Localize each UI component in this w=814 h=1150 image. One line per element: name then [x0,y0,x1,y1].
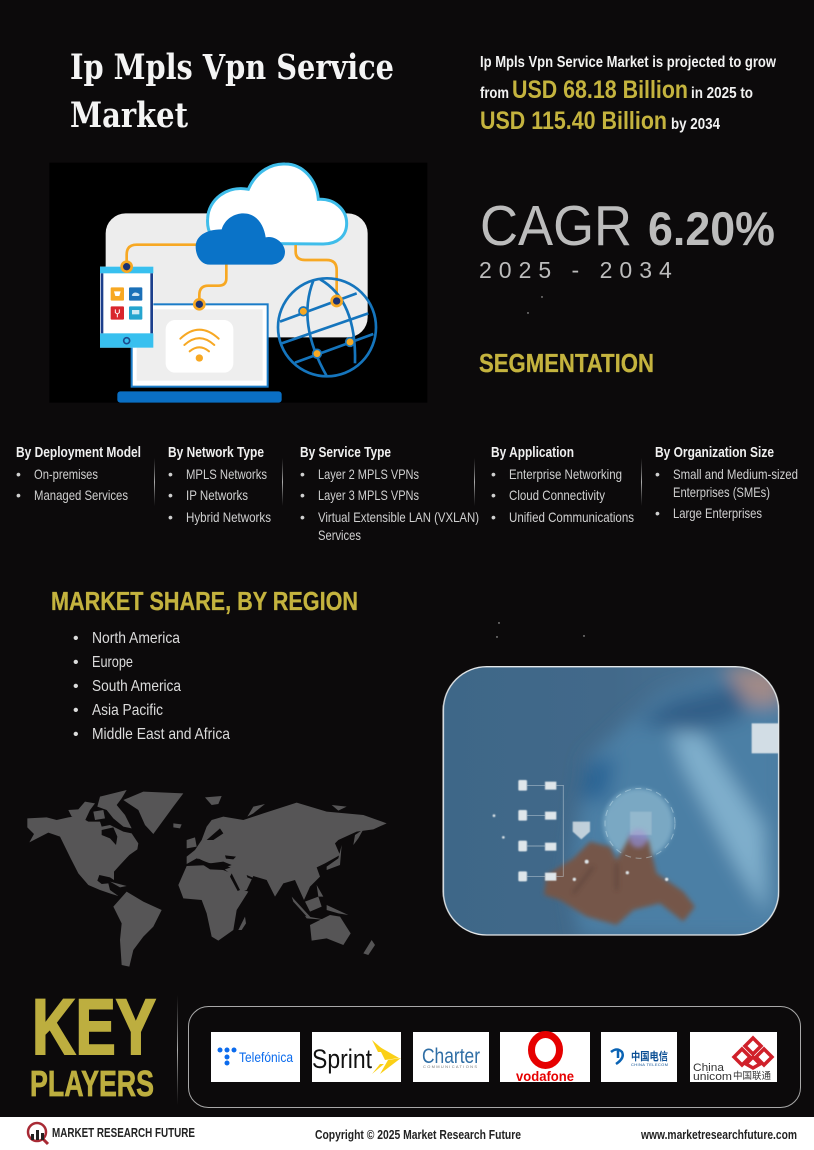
segment: service type: Services [318,527,361,543]
heading: market share by region: MARKET SHARE, BY REGION [51,586,358,616]
market projection text: from [480,85,509,102]
photo: hand touching digital network [443,667,783,937]
icon: tablet [100,262,153,348]
logo: China Telecom [601,1032,677,1082]
logo: Charter [413,1032,489,1082]
CAGR period: 2025 - 2034 [479,257,679,283]
logo: China Telecom: 中国电信 [631,1049,668,1063]
logo: Vodafone [500,1032,590,1084]
illustration: cloud network [49,163,427,403]
region list: Middle East and Africa [92,726,230,743]
segment: deployment model: • [16,466,21,482]
logo: Charter: Charter [422,1045,480,1068]
heading: segmentation: SEGMENTATION [479,348,654,378]
segment: organization size: Large Enterprises [673,505,762,521]
segment: network type: IP Networks [186,487,248,503]
segment: application: • [491,509,496,525]
segment: application [491,444,634,525]
icon: blue cloud [196,213,285,265]
logo: Sprint [312,1032,401,1082]
region list: Asia Pacific [92,702,163,719]
segment: organization size: Enterprises (SMEs) [673,484,770,500]
logo: Telefonica [211,1032,300,1082]
segment: deployment model: By Deployment Model [16,444,141,461]
logo: Sprint: Sprint [312,1044,372,1074]
market projection text: by 2034 [671,116,720,133]
logo: China Telecom: CHINA TELECOM [631,1062,668,1067]
logo: Charter: COMMUNICATIONS [423,1064,477,1069]
region list: Europe [92,654,133,671]
footer [0,1117,814,1150]
segment: application: • [491,487,496,503]
key players heading: KEY [32,982,156,1071]
segment: service type: • [300,487,305,503]
footer brand: MARKET RESEARCH FUTURE [52,1125,195,1140]
region list: North America [92,630,180,647]
market projection text: USD 115.40 Billion [480,107,667,135]
segment: application: • [491,466,496,482]
segment: network type: • [168,466,173,482]
icon: laptop with wifi [117,299,282,403]
title [70,47,394,136]
segment: organization size: • [655,505,660,521]
region list: • [73,702,79,719]
segment: organization size [655,444,798,521]
segment: network type: Hybrid Networks [186,509,271,525]
CAGR value: CAGR [480,194,632,258]
CAGR value [480,194,775,258]
segment: organization size: By Organization Size [655,444,774,461]
panel: key player logos [188,1006,800,1108]
region list: • [73,678,79,695]
market projection text: in 2025 to [691,85,753,102]
connector lines [127,245,337,304]
segment: service type: By Service Type [300,444,391,461]
region list: • [73,630,79,647]
region list: • [73,654,79,671]
logo: China Unicom: unicom [693,1071,732,1083]
segment: application: Unified Communications [509,509,634,525]
key players heading [30,982,156,1104]
segment: network type: By Network Type [168,444,264,461]
segment: network type: • [168,509,173,525]
key players heading: PLAYERS [30,1063,154,1104]
world map [27,790,387,967]
segment: application: Cloud Connectivity [509,487,605,503]
logo: China Unicom: China [693,1062,725,1074]
segment: organization size: • [655,466,660,482]
market projection text: USD 68.18 Billion [512,76,688,104]
icon: globe [278,278,376,376]
segment: deployment model: • [16,487,21,503]
column dividers [154,458,642,506]
segment: service type: • [300,509,305,525]
market projection text [480,54,777,135]
key players divider [177,995,178,1105]
segment: service type: • [300,466,305,482]
segment: application: By Application [491,444,574,461]
segment: deployment model [16,444,141,503]
logo: China Unicom [690,1032,777,1083]
region list: South America [92,678,181,695]
logo: Vodafone: vodafone [516,1069,574,1084]
segment: service type: Virtual Extensible LAN (VXLAN) [318,509,479,525]
segment: deployment model: Managed Services [34,487,128,503]
region list [73,630,230,743]
footer copyright: Copyright © 2025 Market Research Future [315,1127,521,1142]
CAGR value: 6.20% [648,202,775,255]
logo: Telefonica: Telefónica [239,1049,293,1065]
footer logo icon [28,1123,48,1144]
specks [496,296,585,638]
logo: China Unicom: 中国联通 [733,1070,771,1082]
icon: white cloud [208,164,347,244]
segment: application: Enterprise Networking [509,466,622,482]
title: Ip Mpls Vpn Service [70,47,394,88]
segment: service type: Layer 3 MPLS VPNs [318,487,419,503]
segment: network type [168,444,271,525]
segment: service type: Layer 2 MPLS VPNs [318,466,419,482]
segment: deployment model: On-premises [34,466,98,482]
title: Market [70,95,188,136]
segment: service type [300,444,479,543]
segment: network type: • [168,487,173,503]
region list: • [73,726,79,743]
segment: network type: MPLS Networks [186,466,267,482]
